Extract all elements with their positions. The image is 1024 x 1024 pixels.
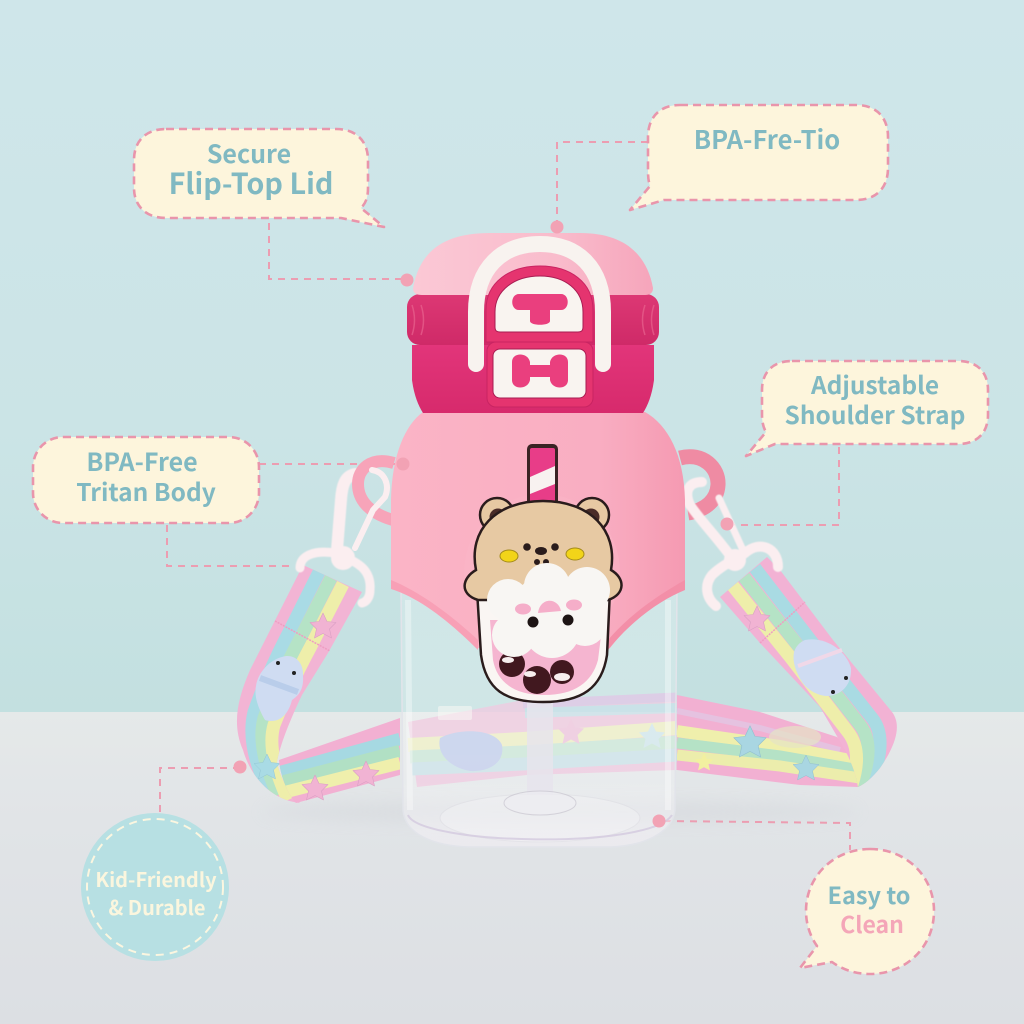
badge: kid-friendly and durable: Kid-Friendly [95, 864, 217, 893]
callout: secure flip-top lid [134, 129, 384, 227]
pink shoulder body [391, 412, 685, 650]
bottle clear body [401, 590, 677, 847]
callout: BPA-free tritan body [33, 437, 259, 523]
lower strap left run [270, 718, 400, 803]
boba pearls [499, 651, 574, 694]
callout: secure flip-top lid: Secure [207, 135, 291, 171]
callout: adjustable shoulder strap [746, 361, 988, 456]
left clip hook arm [355, 470, 387, 548]
flip-top lid [407, 233, 659, 413]
strap seen through the bottle [408, 695, 677, 787]
strap stitching [275, 621, 330, 651]
badge: kid-friendly and durable: & Durable [108, 892, 206, 921]
bottle base [440, 794, 640, 842]
upper button [486, 266, 593, 342]
left strap [237, 565, 362, 803]
cream cloud [487, 563, 610, 658]
jar side reflections [408, 600, 410, 810]
strap base [237, 565, 362, 803]
cream face [515, 600, 582, 628]
badge: kid-friendly and durable [81, 813, 229, 961]
callout: BPA-free tritan body: Tritan Body [76, 474, 216, 509]
lower button [487, 342, 593, 407]
strap character [255, 656, 303, 721]
strap blue star [254, 754, 280, 779]
bear boba charm [465, 444, 622, 702]
straw [527, 444, 558, 506]
connector lines [160, 142, 850, 850]
background wall [0, 0, 1024, 713]
callout: BPA-Fre-Tio [630, 105, 888, 210]
strap stitching [760, 602, 805, 643]
left pink strap loop [358, 461, 394, 520]
callout: secure flip-top lid: Flip-Top Lid [169, 162, 333, 203]
product shadow [260, 802, 860, 822]
right carabiner clip [687, 482, 778, 606]
inner straw [527, 695, 553, 795]
callout: adjustable shoulder strap: Adjustable [810, 367, 939, 402]
callout: BPA-free tritan body: BPA-Free [86, 443, 198, 479]
strap character [793, 639, 851, 696]
left clip shank [300, 474, 370, 603]
strap end tab inside bottle [438, 706, 472, 720]
bear head [465, 498, 622, 600]
seen-through character [439, 731, 502, 771]
callout: easy to clean [800, 849, 934, 974]
table surface [0, 712, 1024, 1024]
callout: easy to clean: Easy to [828, 877, 910, 911]
strap star [734, 726, 766, 757]
callout: adjustable shoulder strap: Shoulder Strap [785, 397, 965, 432]
anchor dots [234, 220, 734, 828]
callout: BPA-Fre-Tio: BPA-Fre-Tio [694, 120, 840, 157]
strap logo [769, 726, 821, 748]
right pink strap loop [680, 457, 718, 513]
callout: easy to clean: Clean [840, 906, 904, 940]
lid dome [413, 233, 653, 295]
white arch handle [476, 244, 603, 364]
cup [477, 590, 610, 702]
lid grip band [407, 294, 659, 345]
strap star [744, 606, 770, 631]
seen-through star [558, 719, 584, 744]
strap star [353, 761, 379, 786]
grip ribs [412, 305, 654, 335]
right strap lower run [677, 695, 872, 787]
strap star [310, 613, 336, 638]
right strap diagonal [720, 557, 897, 800]
lid lower collar [412, 345, 654, 413]
